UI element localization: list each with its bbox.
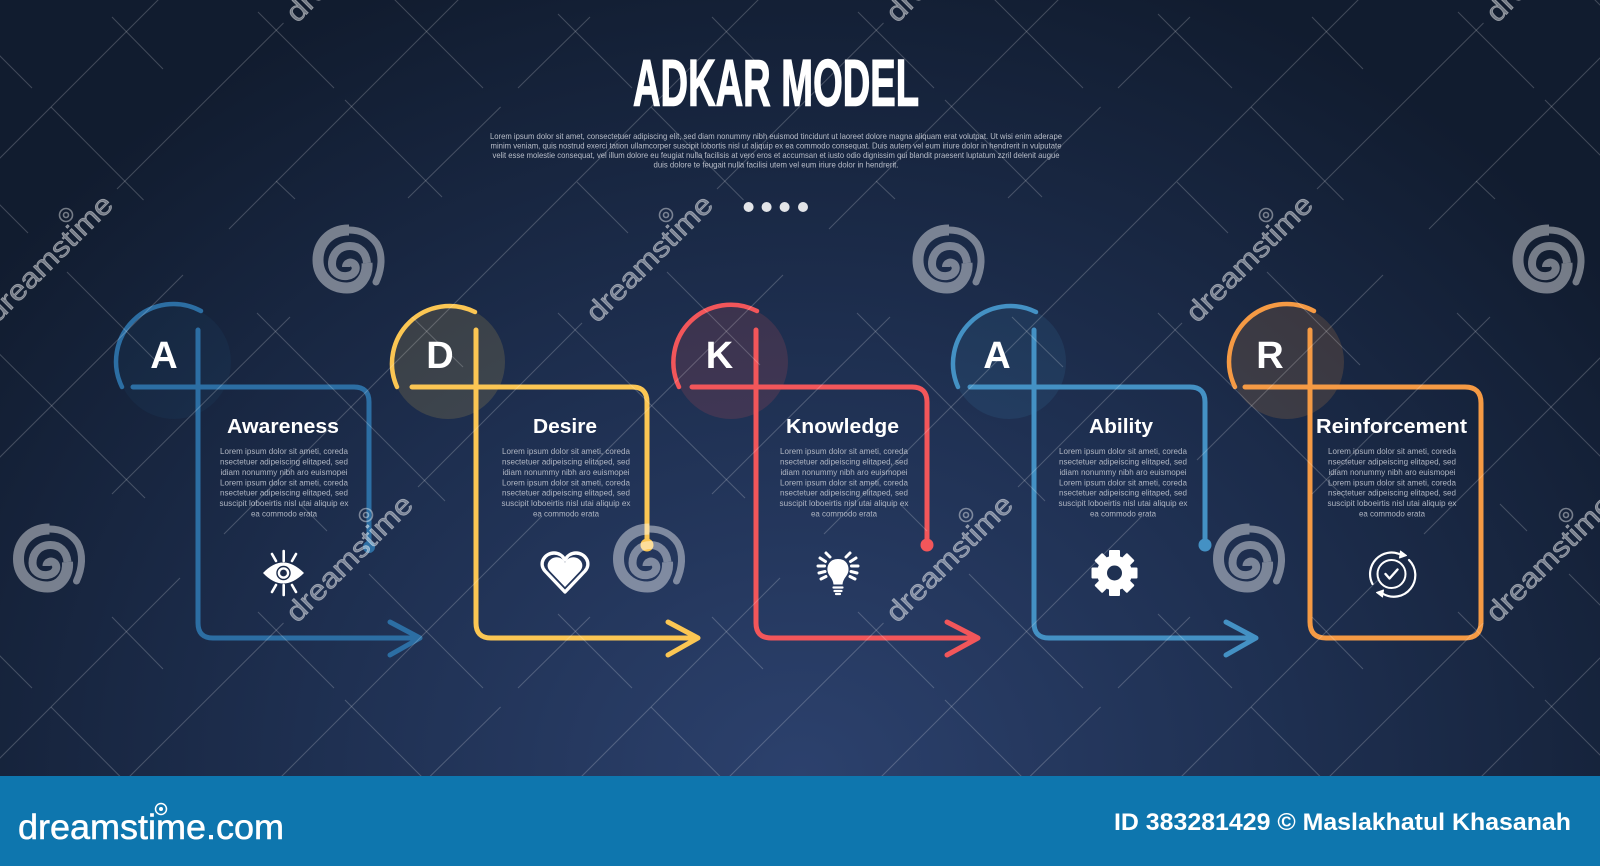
- description: Lorem ipsum dolor sit ameti, coreda: [220, 477, 348, 487]
- pagination dots: [744, 202, 808, 212]
- description: Lorem ipsum dolor sit ameti, coreda: [1328, 446, 1456, 456]
- letter badge K: K: [706, 335, 734, 377]
- flow arrow outline: [692, 330, 978, 655]
- description: nsectetuer adipeiscing elitaped, sed: [1059, 488, 1187, 498]
- description: Lorem ipsum dolor sit ameti, coreda: [502, 477, 630, 487]
- description: [1328, 446, 1457, 518]
- description: ea commodo erata: [533, 508, 599, 518]
- description: suscipit loboeirtis nisl utai aliquip ex: [1328, 498, 1457, 508]
- heading: Ability: [1089, 416, 1154, 438]
- closed outline: [1245, 330, 1481, 638]
- description: nsectetuer adipeiscing elitaped, sed: [1328, 488, 1456, 498]
- letter badge R: R: [1256, 335, 1284, 377]
- description: [1058, 446, 1188, 518]
- watermark: dreamstime text: [0, 0, 1600, 628]
- intro text block: velit esse molestie consequat, vel illum dolore eu feugiat nulla facilisis at vero eros et accumsan et iusto odio dignissim qui blandit praesent luptatum zzril delenit augue: [492, 151, 1060, 160]
- letter badge R: [1229, 304, 1344, 419]
- letter badge K: [673, 305, 788, 419]
- description: idiam nonummy nibh aro euismopei: [1328, 467, 1456, 477]
- icon: cycle check: [1370, 551, 1415, 597]
- description: nsectetuer adipeiscing elitaped, sed: [780, 488, 908, 498]
- description: Lorem ipsum dolor sit ameti, coreda: [502, 446, 630, 456]
- panel: Desire: [391, 305, 698, 655]
- letter badge D: D: [426, 335, 454, 377]
- description: [502, 446, 631, 518]
- heading: Desire: [533, 416, 597, 438]
- heading: Reinforcement: [1316, 416, 1467, 438]
- description: idiam nonummy nibh aro euismopei: [220, 467, 348, 477]
- letter badge A: A: [983, 335, 1011, 377]
- flow arrow outline: [970, 330, 1256, 655]
- icon: light bulb: [818, 553, 858, 594]
- description: Lorem ipsum dolor sit ameti, coreda: [1059, 477, 1187, 487]
- letter badge D: [391, 305, 505, 419]
- description: ea commodo erata: [251, 508, 317, 518]
- description: Lorem ipsum dolor sit ameti, coreda: [1328, 477, 1456, 487]
- description: suscipit loboeirtis nisl utai aliquip ex: [502, 498, 631, 508]
- intro text block: Lorem ipsum dolor sit amet, consectetuer adipiscing elit, sed diam nonummy nibh euismod tincidunt ut laoreet dolore magna aliquam erat volutpat. Ut wisi enim aderape: [490, 132, 1062, 141]
- description: [220, 446, 349, 518]
- description: nsectetuer adipeiscing elitaped, sed: [502, 456, 630, 466]
- letter badge A: [116, 304, 231, 419]
- description: suscipit loboeirtis nisl utai aliquip ex: [220, 498, 349, 508]
- intro text block: minim veniam, quis nostrud exerci tation ullamcorper suscipit lobortis nisl ut aliquip ex ea commodo consequat. Duis autem vel eum iriure dolor in hendrerit in vulputate: [490, 142, 1062, 150]
- heading: Knowledge: [786, 416, 899, 438]
- watermark: dreamstime text: dreamstime: [1180, 189, 1319, 328]
- flow arrow outline: [133, 330, 420, 655]
- description: Lorem ipsum dolor sit ameti, coreda: [220, 446, 348, 456]
- letter badge A: [952, 305, 1066, 419]
- image credit: ID 383281429 © Maslakhatul Khasanah: [1114, 809, 1571, 836]
- description: Lorem ipsum dolor sit ameti, coreda: [780, 477, 908, 487]
- description: Lorem ipsum dolor sit ameti, coreda: [1059, 446, 1187, 456]
- icon: eye: [263, 551, 304, 595]
- watermark: dreamstime text: dreamstime: [880, 489, 1019, 628]
- panel: Knowledge: [673, 305, 978, 655]
- description: suscipit loboeirtis nisl utai aliquip ex: [1058, 498, 1188, 508]
- description: suscipit loboeirtis nisl utai aliquip ex: [780, 498, 909, 508]
- description: nsectetuer adipeiscing elitaped, sed: [1059, 456, 1187, 466]
- panel: Reinforcement: [1229, 304, 1481, 638]
- watermark: dreamstime text: dreamstime: [580, 189, 719, 328]
- description: nsectetuer adipeiscing elitaped, sed: [220, 456, 348, 466]
- description: idiam nonummy nibh aro euismopei: [780, 467, 908, 477]
- intro text block: [490, 132, 1062, 170]
- title: ADKAR MODEL: [633, 46, 919, 120]
- description: nsectetuer adipeiscing elitaped, sed: [780, 456, 908, 466]
- intro text block: duis dolore te feugait nulla facilisi utem vel eum iriure dolor in hendrerit.: [654, 160, 898, 170]
- description: Lorem ipsum dolor sit ameti, coreda: [780, 446, 908, 456]
- icon: gear: [1092, 550, 1138, 596]
- heading: Awareness: [227, 416, 339, 438]
- description: nsectetuer adipeiscing elitaped, sed: [502, 488, 630, 498]
- letter badge A: A: [150, 335, 178, 377]
- description: ea commodo erata: [1090, 508, 1156, 518]
- footer bar: [0, 776, 1600, 866]
- icon: heart: [542, 553, 588, 592]
- description: nsectetuer adipeiscing elitaped, sed: [1328, 456, 1456, 466]
- description: [780, 446, 909, 518]
- description: idiam nonummy nibh aro euismopei: [502, 467, 630, 477]
- panel: Ability: [952, 305, 1256, 655]
- description: ea commodo erata: [1359, 508, 1425, 518]
- footer logo: dreamstime.com: [18, 808, 284, 847]
- watermark: spiral logos: [18, 230, 1581, 587]
- flow arrow outline: [412, 330, 698, 655]
- description: idiam nonummy nibh aro euismopei: [1060, 467, 1187, 477]
- description: nsectetuer adipeiscing elitaped, sed: [220, 488, 348, 498]
- description: ea commodo erata: [811, 508, 877, 518]
- watermark: dreamstime text: dreamstime: [280, 489, 419, 628]
- panel: Awareness: [116, 304, 420, 655]
